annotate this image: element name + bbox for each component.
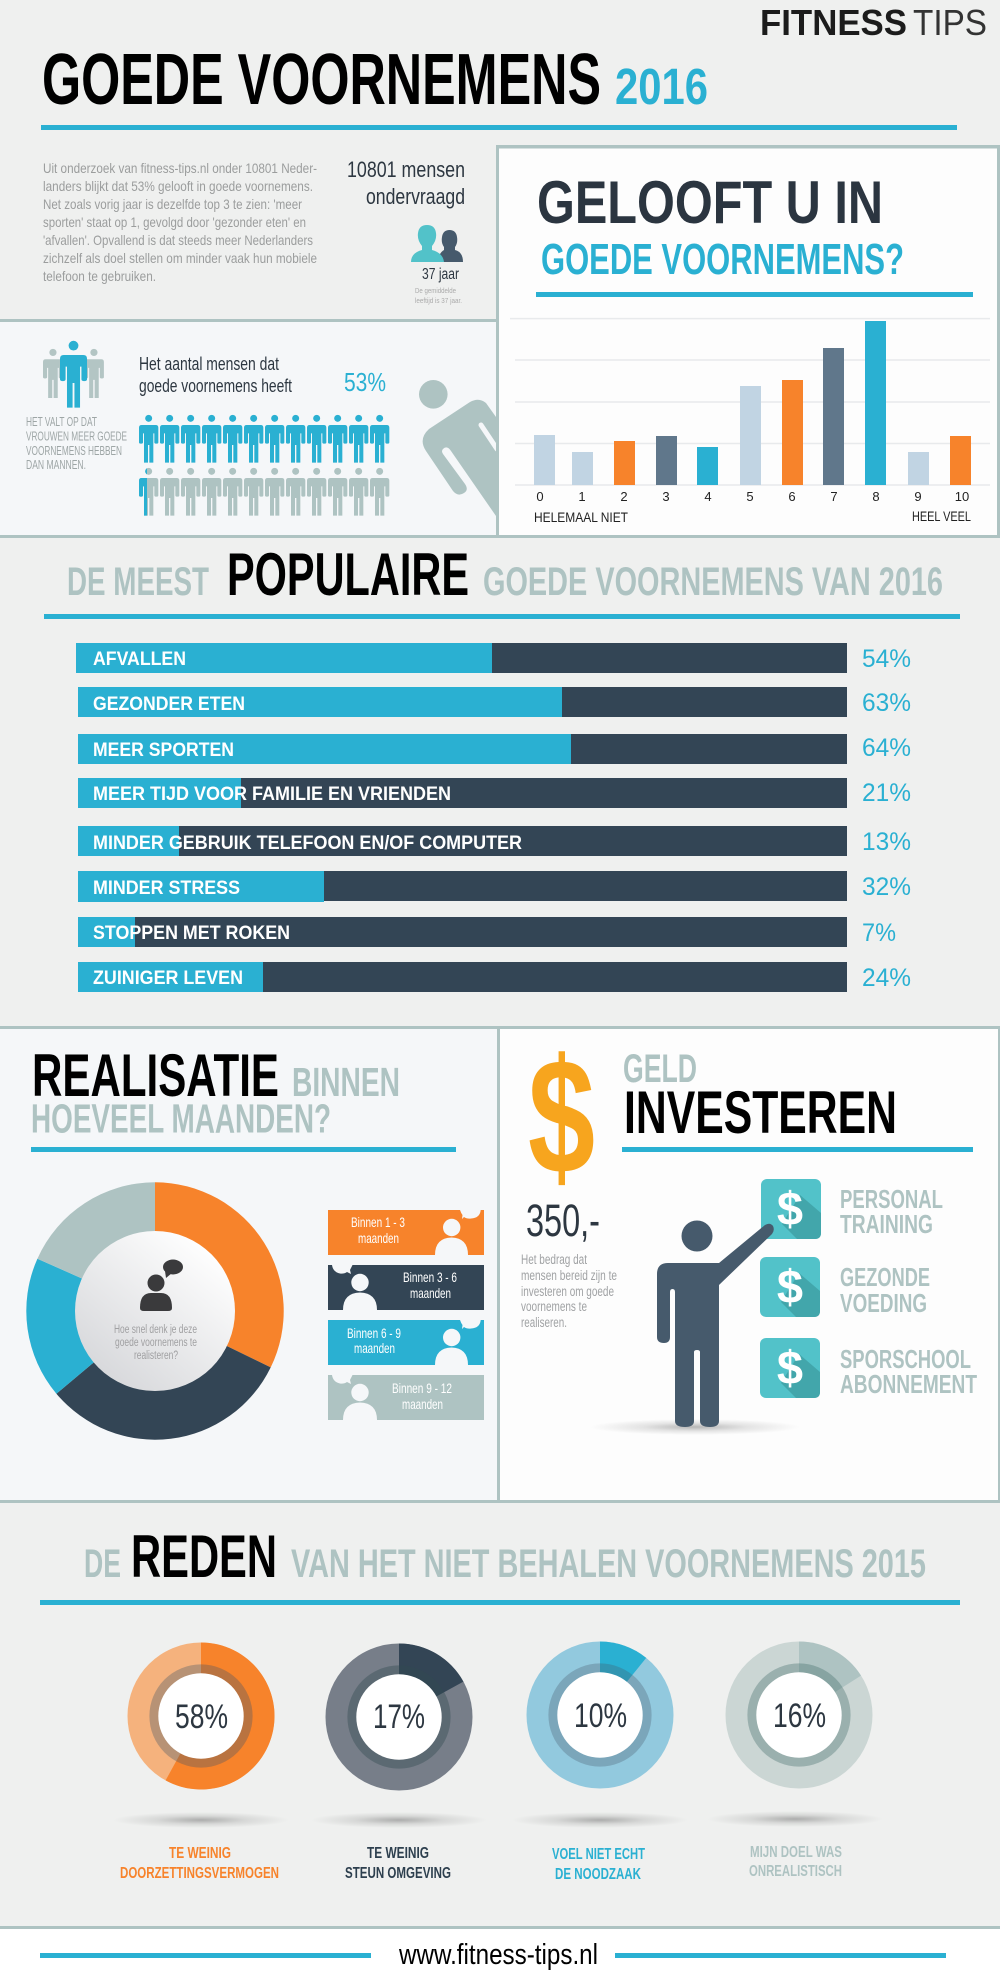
heading — [31, 1042, 456, 1152]
donut: 58 percent: DOORZETTINGSVERMOGEN — [120, 1865, 279, 1882]
legend: 9-12 months — [328, 1375, 484, 1420]
pictogram row: blue people — [139, 415, 389, 463]
bar chart: 7 — [830, 489, 838, 504]
donut: 10 percent: DE NOODZAAK — [555, 1866, 642, 1883]
intro text block: zichzelf als doel stellen om minder vaak hun mobiele — [43, 250, 317, 266]
intro text block: telefoon te gebruiken. — [43, 268, 156, 284]
donut caption — [114, 1324, 197, 1362]
intro text block: landers blijkt dat 53% gelooft in goede voornemens. — [43, 178, 313, 194]
stat: 53 percent: Het aantal mensen dat — [139, 354, 279, 374]
bar: stoppen met roken: 7% — [862, 919, 896, 947]
icon: speaking person — [140, 1260, 183, 1311]
heading: GELD — [623, 1047, 697, 1091]
bar: minder gebruik telefoon — [78, 826, 911, 856]
title: 2016 — [615, 58, 708, 115]
donut: 10 percent — [512, 1642, 688, 1883]
legend: 3-6 months: maanden — [410, 1285, 451, 1301]
logo: fitness tips: TIPS — [913, 2, 987, 43]
footer: www.fitness-tips.nl — [398, 1939, 598, 1971]
intro text block: Net zoals vorig jaar is dezelfde top 3 te zien: 'meer — [43, 196, 302, 212]
shadow under person — [590, 1419, 800, 1435]
donut: 58 percent — [113, 1642, 289, 1882]
stat: 350: realiseren. — [521, 1315, 567, 1330]
stat: people surveyed: ondervraagd — [366, 184, 465, 209]
icon: dollar tiles: $ — [777, 1260, 803, 1313]
bar: gezonder eten: 63% — [862, 689, 911, 717]
bar: stoppen met roken — [78, 917, 896, 947]
icon: dollar tiles: $ — [777, 1182, 803, 1235]
heading — [44, 541, 960, 619]
heading: POPULAIRE — [227, 541, 469, 608]
legend: 1-3 months — [328, 1210, 484, 1255]
stat: 53 percent — [139, 354, 386, 397]
bar chart: 9 — [914, 489, 922, 504]
note: women: VOORNEMENS HEBBEN — [26, 443, 122, 458]
bar chart: 3 — [662, 489, 670, 504]
heading: INVESTEREN — [624, 1079, 897, 1146]
stat: 350 — [521, 1195, 617, 1330]
bar: meer sporten — [78, 734, 911, 764]
bar chart: 2 — [620, 489, 628, 504]
stat: people surveyed: 37 jaar — [422, 266, 459, 283]
bar: zuiniger leven: 24% — [862, 964, 911, 992]
logo: fitness tips — [760, 2, 987, 43]
heading: REDEN — [131, 1523, 277, 1590]
donut: 16 percent — [707, 1642, 883, 1880]
bar: zuiniger leven — [78, 962, 911, 992]
bar: afvallen: 54% — [862, 645, 911, 673]
icon: three people — [43, 341, 104, 408]
icon: dollar tiles — [760, 1179, 821, 1398]
bar: minder gebruik telefoon: 13% — [862, 828, 911, 856]
bar: afvallen — [76, 643, 911, 673]
bar: minder gebruik telefoon: MINDER GEBRUIK TELEFOON EN/OF COMPUTER — [93, 833, 522, 854]
bar chart: 4 — [704, 489, 712, 504]
note: women: VROUWEN MEER GOEDE — [26, 428, 127, 444]
bar: meer tijd: 21% — [862, 779, 911, 807]
stat: 53 percent: goede voornemens heeft — [139, 376, 292, 396]
donut: 58 percent: TE WEINIG — [169, 1845, 231, 1862]
heading — [40, 1523, 960, 1605]
stat: people surveyed: De gemiddelde — [415, 286, 456, 295]
stat: 350: investeren om goede — [521, 1284, 614, 1299]
stat: people surveyed: leeftijd is 37 jaar. — [415, 296, 462, 305]
bar chart: 6 — [788, 489, 796, 504]
stat: people surveyed: 10801 mensen — [347, 157, 465, 182]
panel: populaire voornemens — [44, 541, 960, 992]
bar: stoppen met roken: STOPPEN MET ROKEN — [93, 923, 290, 944]
stat: 350: voornemens te — [521, 1299, 587, 1314]
bar chart — [510, 319, 990, 525]
heading: DE MEEST — [67, 560, 209, 604]
labels: investments: GEZONDE — [840, 1262, 930, 1292]
donut: 16 percent: MIJN DOEL WAS — [750, 1844, 842, 1861]
panel: de reden — [40, 1523, 960, 1883]
legend: 6-9 months — [328, 1320, 484, 1365]
donut: 16 percent: 16% — [773, 1697, 826, 1735]
donut: 17 percent: 17% — [373, 1698, 425, 1736]
bar: meer sporten: 64% — [862, 734, 911, 762]
intro text block: Uit onderzoek van fitness-tips.nl onder 10801 Neder- — [43, 160, 317, 176]
legend: 9-12 months: Binnen 9 - 12 — [392, 1380, 452, 1396]
legend: 6-9 months: maanden — [354, 1340, 395, 1356]
icon: person pointing — [657, 1220, 774, 1427]
bar: meer tijd: MEER TIJD VOOR FAMILIE EN VRIENDEN — [93, 784, 451, 805]
bar: meer sporten: MEER SPORTEN — [93, 740, 234, 761]
donut caption: Hoe snel denk je deze — [114, 1324, 197, 1336]
note: women: DAN MANNEN. — [26, 457, 86, 472]
logo: fitness tips: FITNESS — [760, 2, 907, 43]
bar: zuiniger leven: ZUINIGER LEVEN — [93, 968, 243, 989]
footer — [0, 1926, 1000, 1985]
bar chart: 10 — [955, 489, 969, 504]
bar: minder stress: MINDER STRESS — [93, 878, 240, 899]
intro text block: 'afvallen'. Opvallend is dat steeds meer Nederlanders — [43, 232, 313, 248]
pictogram row: grey people — [139, 468, 389, 516]
bar: afvallen: AFVALLEN — [93, 649, 186, 670]
bar chart: HEEL VEEL — [912, 509, 971, 524]
bar chart: 1 — [578, 489, 586, 504]
bar chart: 8 — [872, 489, 880, 504]
heading: BINNEN — [292, 1059, 400, 1105]
stat: 350: Het bedrag dat — [521, 1252, 587, 1267]
panel: realisatie — [0, 1029, 497, 1500]
bar chart: 0 — [536, 489, 544, 504]
donut: 58 percent: 58% — [175, 1698, 228, 1736]
bar: minder stress: 32% — [862, 873, 911, 901]
heading: HOEVEEL MAANDEN? — [31, 1096, 331, 1142]
heading — [622, 1047, 973, 1152]
legend: 1-3 months: maanden — [358, 1230, 399, 1246]
legend: 9-12 months: maanden — [402, 1396, 443, 1412]
bar: meer tijd — [78, 778, 911, 808]
donut chart — [26, 1182, 284, 1440]
donut: 10 percent: 10% — [574, 1697, 627, 1735]
heading: DE — [84, 1542, 121, 1586]
donut caption: goede voornemens te — [115, 1337, 197, 1349]
labels: investments: TRAINING — [840, 1209, 933, 1239]
panel: people with resolutions — [0, 319, 497, 535]
bar: gezonder eten — [78, 687, 911, 717]
donut: 17 percent — [311, 1644, 487, 1882]
labels: investments — [840, 1184, 977, 1399]
heading: GELOOFT U IN — [537, 169, 883, 236]
legend: 3-6 months — [328, 1265, 484, 1310]
icon: big dollar: $ — [528, 1025, 595, 1208]
icon: large grey person — [419, 380, 497, 516]
title: GOEDE VOORNEMENS — [42, 40, 601, 120]
bar chart: HELEMAAL NIET — [534, 510, 628, 525]
panel: gelooft u in goede voornemens — [496, 145, 1000, 538]
panel: geld investeren — [497, 1025, 1000, 1500]
bar: minder stress — [78, 871, 911, 902]
heading: REALISATIE — [32, 1042, 279, 1109]
intro text block: sporten' staat op 1, gevolgd door 'gezonder eten' en — [43, 214, 306, 230]
legend: 3-6 months: Binnen 3 - 6 — [403, 1269, 457, 1285]
note: women: HET VALT OP DAT — [26, 414, 97, 429]
donut: 16 percent: ONREALISTISCH — [749, 1863, 842, 1880]
donut caption: realisteren? — [134, 1350, 178, 1362]
donut: 17 percent: TE WEINIG — [367, 1845, 429, 1862]
intro text block — [43, 160, 317, 284]
bar: gezonder eten: GEZONDER ETEN — [93, 694, 245, 715]
stat: people surveyed — [347, 157, 465, 305]
donut: 17 percent: STEUN OMGEVING — [345, 1865, 451, 1882]
stat: 53 percent: 53% — [344, 367, 386, 397]
bar chart: 5 — [746, 489, 754, 504]
donut: 10 percent: VOEL NIET ECHT — [552, 1846, 645, 1863]
stat: 350: mensen bereid zijn te — [521, 1268, 617, 1283]
legend: 6-9 months: Binnen 6 - 9 — [347, 1325, 401, 1341]
icon: dollar tiles: $ — [777, 1341, 803, 1394]
legend: 1-3 months: Binnen 1 - 3 — [351, 1214, 405, 1230]
stat: 350: 350,- — [526, 1195, 600, 1246]
labels: investments: VOEDING — [840, 1288, 927, 1318]
heading — [536, 169, 973, 297]
labels: investments: PERSONAL — [840, 1184, 943, 1214]
note: women — [26, 414, 127, 472]
